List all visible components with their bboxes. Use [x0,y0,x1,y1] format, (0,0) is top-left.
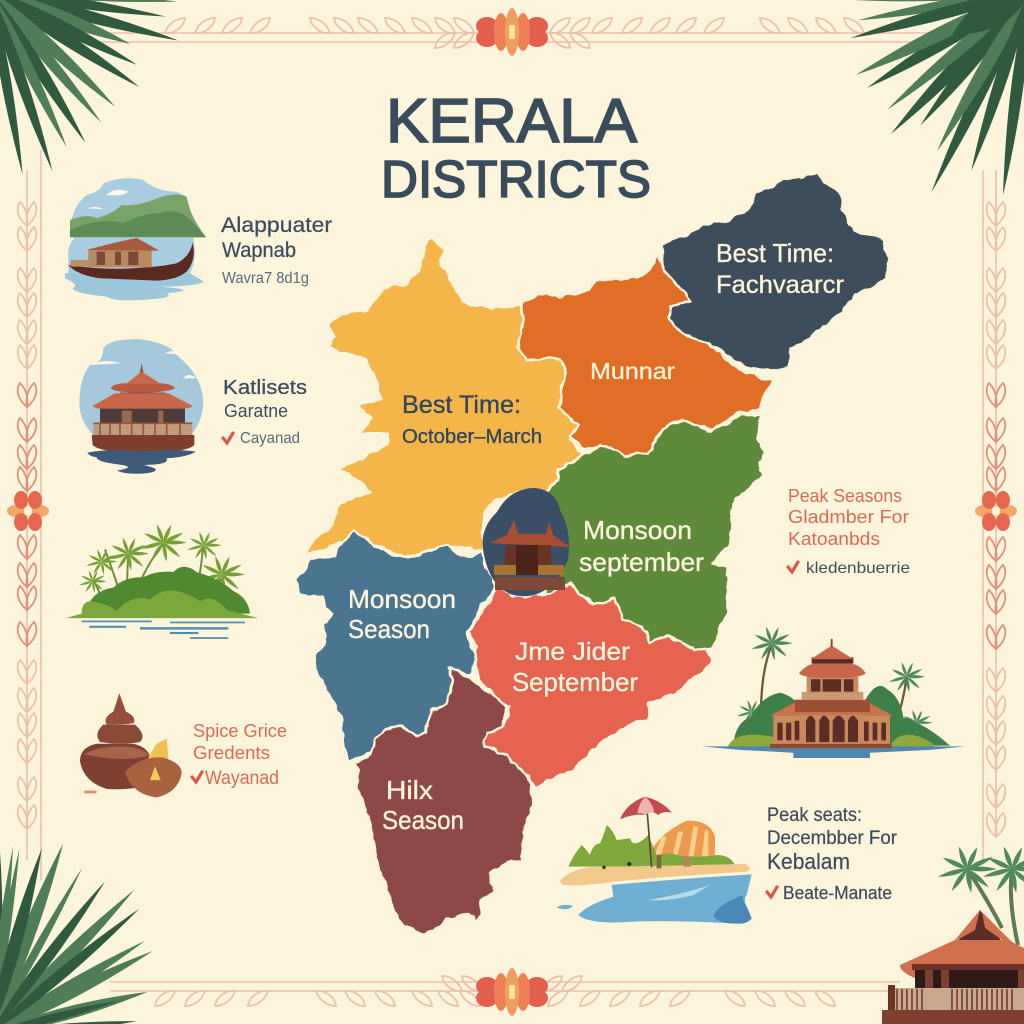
icon: check [223,433,233,443]
text: Peak Seasons block: Katoanbds [788,529,880,549]
map labels [348,238,844,835]
icon: check [788,562,798,572]
flower: bottom centre [476,968,548,1016]
icon: heritage palace on island [702,626,965,758]
text: Spice block: Wayanad [205,768,279,789]
flower: right [975,491,1017,531]
palm fronds: bottom left [0,841,156,1024]
label: green district: september [579,547,704,577]
text: Peak seats block: Peak seats: [767,805,862,826]
icon: central temple on map [483,488,570,596]
text: Kattisets block: Garatne [224,401,288,421]
label: yellow district: October–March [402,426,542,448]
icon: check [767,887,777,897]
district: red [468,582,712,787]
label: blue district [348,584,456,644]
label: navy district: Best Time: [716,238,834,268]
district: yellow [306,237,584,557]
text: Kattisets block [223,377,307,447]
label: maroon district: Hilx [386,775,433,805]
district: maroon [353,668,533,935]
icon: palm island [66,524,258,639]
text: Peak seats block: Decembber For [767,828,898,849]
district: navy [661,173,889,372]
text: Alappuater block [221,214,332,287]
text: Peak seats block: Kebalam [767,849,850,874]
district: orange [518,253,772,455]
text: Spice block: Gredents [193,743,270,763]
label: maroon district: Season [382,805,464,835]
label: green district: Monsoon [583,515,692,545]
text: Peak Seasons block [788,486,910,577]
icon: houseboat on backwaters [65,178,206,300]
label: navy district [716,238,844,299]
district: green [545,413,765,650]
icon: spice pots [80,693,182,798]
label: blue district: Monsoon [348,584,456,614]
label: maroon district [382,775,464,835]
icon: corner palms and hut [882,846,1024,1024]
title [381,87,651,209]
label: Munnar: Munnar [590,358,675,384]
text: Peak seats block: Beate-Manate [783,883,892,903]
icon: check [192,772,202,782]
text: Spice block [192,721,287,789]
flower: left [7,491,49,531]
label: red district: Jme Jider [515,638,630,666]
label: green district [579,515,704,577]
text: Spice block: Spice Grice [193,721,287,741]
label: red district [512,638,638,697]
district: blue [295,530,493,762]
flower: top centre [476,8,548,56]
text: Alappuater block: Alappuater [221,214,332,237]
label: yellow district: Best Time: [402,391,521,419]
text: Alappuater block: Wavra7 8d1g [222,270,309,287]
text: Peak seats block [767,805,898,903]
palm fronds: top right [846,0,1024,196]
label: red district: September [512,667,638,697]
title: KERALA [386,87,638,156]
palm fronds: top left [0,0,180,176]
label: blue district: Season [348,614,430,644]
text: Peak Seasons block: kledenbuerrie [806,560,910,577]
title: DISTRICTS [381,151,651,209]
text: Alappuater block: Wapnab [222,239,296,262]
text: Kattisets block: Katlisets [223,377,307,399]
Kerala district map [295,173,889,935]
label: yellow district [402,391,542,448]
icon: beach with umbrella [557,797,752,924]
icon: temple in circle [79,339,203,474]
text: Peak Seasons block: Peak Seasons [788,486,902,506]
text: Peak Seasons block: Gladmber For [788,507,909,527]
text: Kattisets block: Cayanad [240,430,300,447]
label: navy district: Fachvaarcr [716,271,844,299]
